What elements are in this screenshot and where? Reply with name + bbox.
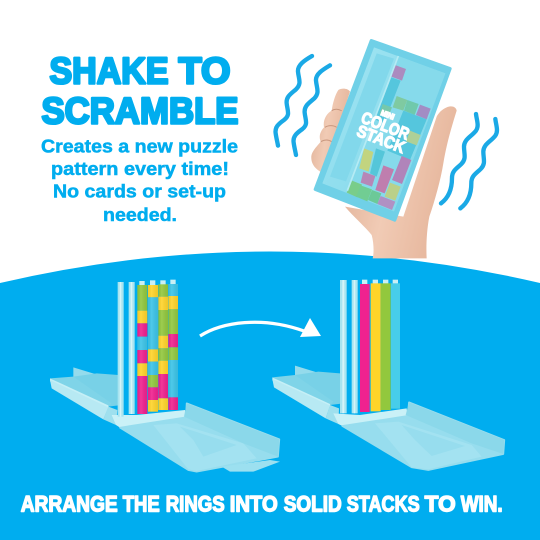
yellow stack	[371, 283, 381, 411]
blue background	[0, 252, 540, 540]
box logo	[354, 108, 412, 157]
green stack	[381, 283, 391, 410]
title	[42, 51, 238, 132]
column 2	[148, 285, 158, 412]
column 1	[137, 285, 147, 414]
caption: THE	[123, 492, 160, 517]
cyan stack	[391, 283, 400, 409]
caption: INTO	[230, 492, 278, 517]
title: SHAKE	[50, 51, 168, 92]
rings and poles	[118, 280, 178, 417]
title: SCRAMBLE	[42, 91, 238, 132]
icon: left shake waves	[276, 56, 330, 155]
description text: needed.	[103, 204, 177, 225]
box logo: COLOR	[359, 108, 412, 144]
solved rings and poles	[340, 280, 400, 413]
product box	[315, 41, 450, 220]
description text: pattern every time!	[51, 158, 229, 179]
caption: RINGS	[166, 492, 225, 517]
open tray and lid	[50, 367, 280, 472]
column 3	[158, 284, 168, 410]
caption: ARRANGE	[21, 492, 118, 517]
rings inside box	[347, 65, 431, 210]
left game: scrambled	[50, 280, 280, 472]
description text: Creates a new puzzle	[41, 136, 238, 156]
box logo: STACK	[354, 121, 408, 157]
caption: SOLID	[284, 492, 342, 517]
description text: No cards or set-up	[53, 180, 226, 202]
caption: WIN.	[461, 492, 503, 517]
arrow	[200, 318, 321, 337]
right game: solved	[272, 280, 504, 470]
box logo: MINI	[379, 108, 396, 122]
hand	[311, 89, 457, 258]
title: TO	[178, 51, 230, 92]
caption	[21, 492, 503, 517]
magenta stack	[360, 284, 370, 412]
caption: TO	[425, 492, 456, 517]
caption: STACKS	[347, 492, 420, 517]
illustration: hand shaking the box	[276, 41, 497, 258]
open tray and lid	[272, 366, 504, 470]
icon: right shake waves	[441, 114, 497, 208]
column 4	[168, 284, 178, 410]
description text	[41, 136, 238, 225]
